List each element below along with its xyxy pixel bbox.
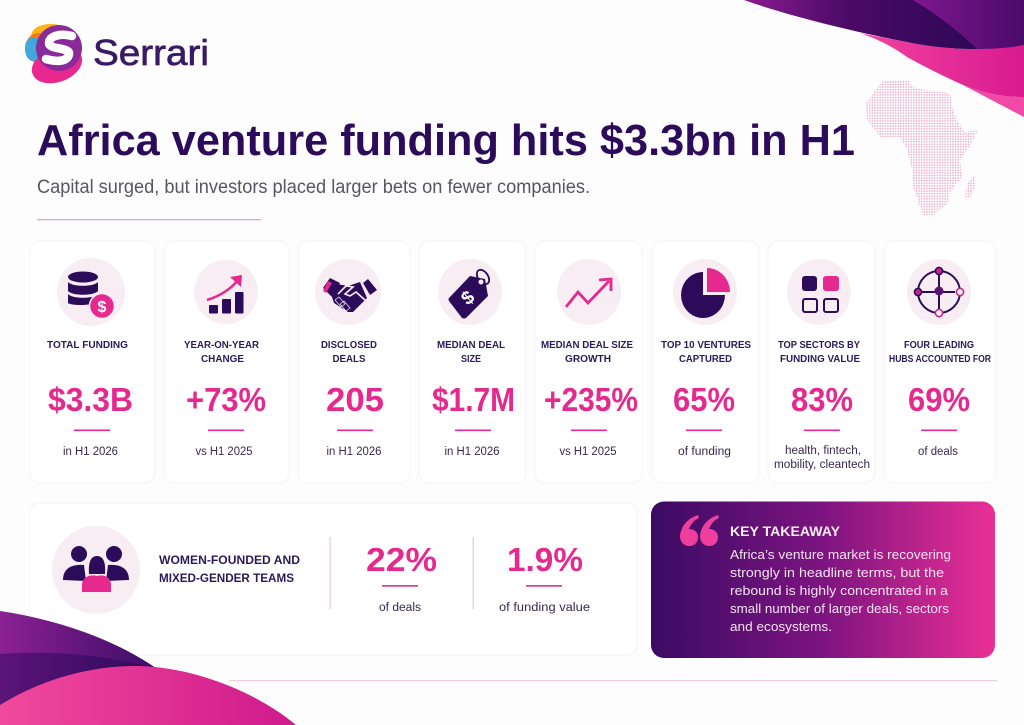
stat: 22% of deals bbox=[366, 541, 437, 614]
note: in H1 2026 bbox=[326, 446, 382, 458]
label: FOUR LEADING bbox=[904, 339, 974, 351]
panel: median deal size: SIZE bbox=[461, 353, 481, 365]
body text bbox=[730, 547, 951, 634]
subtitle: Capital surged, but investors placed larger bets on fewer companies. bbox=[37, 177, 590, 198]
value: $1.7M bbox=[432, 381, 515, 418]
label: MEDIAN DEAL bbox=[437, 339, 506, 351]
logo: Serrari bbox=[25, 23, 209, 90]
label: TOP SECTORS BY bbox=[778, 339, 860, 351]
panel: total funding bbox=[30, 241, 155, 483]
note: of funding bbox=[678, 446, 731, 458]
body text: Africa’s venture market is recovering bbox=[730, 547, 951, 562]
panel: four leading hubs: HUBS ACCOUNTED FOR bbox=[889, 353, 991, 365]
icon: coin stack: $ bbox=[98, 299, 107, 316]
icon: pie chart bbox=[673, 259, 737, 325]
value: +73% bbox=[186, 381, 266, 418]
icon: rising bars bbox=[194, 260, 258, 324]
icon: quote marks bbox=[680, 515, 719, 546]
icon: hub network bbox=[907, 259, 971, 325]
icon: price tag bbox=[438, 259, 502, 325]
panel: women-founded teams: MIXED-GENDER TEAMS bbox=[159, 571, 294, 585]
note: vs H1 2025 bbox=[560, 446, 616, 458]
note: vs H1 2025 bbox=[196, 446, 252, 458]
note: in H1 2026 bbox=[444, 446, 500, 458]
label: TOTAL FUNDING bbox=[47, 339, 128, 351]
icon: handshake bbox=[315, 259, 381, 325]
panel: disclosed deals bbox=[298, 241, 410, 483]
icon: team of people bbox=[52, 526, 140, 614]
stat: 22% of deals: 22% bbox=[366, 541, 437, 578]
wordmark: Serrari bbox=[93, 32, 209, 73]
heading: KEY TAKEAWAY bbox=[730, 523, 841, 539]
icon: zigzag arrow bbox=[557, 259, 621, 325]
panel: median deal size growth bbox=[535, 241, 642, 483]
label: WOMEN-FOUNDED AND bbox=[159, 553, 300, 567]
body text: strongly in headline terms, but the bbox=[730, 565, 944, 580]
stat: 1.9% of funding value: of funding value bbox=[499, 602, 590, 614]
panel: disclosed deals: DEALS bbox=[332, 353, 366, 365]
panel: women-founded teams bbox=[30, 503, 637, 655]
value: +235% bbox=[544, 381, 638, 418]
icon: coin stack bbox=[57, 258, 125, 326]
note: in H1 2026 bbox=[63, 446, 118, 458]
label: YEAR-ON-YEAR bbox=[184, 339, 259, 351]
body text: and ecosystems. bbox=[730, 619, 832, 634]
value: 83% bbox=[791, 381, 853, 418]
note: health, fintech, bbox=[785, 445, 861, 457]
panel: top sectors bbox=[768, 241, 875, 483]
callout: key takeaway bbox=[651, 502, 995, 658]
icon: price tag: $ bbox=[458, 287, 479, 310]
panel: top 10 ventures bbox=[652, 241, 759, 483]
body text: small number of larger deals, sectors bbox=[730, 601, 949, 616]
map: Africa dotted bbox=[866, 81, 978, 215]
value: 65% bbox=[673, 381, 735, 418]
body text: rebound is highly concentrated in a bbox=[730, 583, 949, 598]
icon: logo mark bbox=[25, 23, 87, 90]
stat: 1.9% of funding value bbox=[499, 541, 590, 614]
panel: four leading hubs bbox=[884, 241, 996, 483]
label: DISCLOSED bbox=[321, 339, 377, 351]
panel: year-on-year change: CHANGE bbox=[201, 353, 244, 365]
value: 205 bbox=[326, 381, 384, 418]
panel: median deal size growth: GROWTH bbox=[565, 353, 611, 365]
value: 69% bbox=[908, 381, 970, 418]
decorative wave: top right bbox=[744, 0, 1024, 117]
title: Africa venture funding hits $3.3bn in H1 bbox=[37, 116, 855, 165]
icon: sector squares bbox=[787, 259, 851, 325]
stat: 1.9% of funding value: 1.9% bbox=[507, 541, 583, 578]
label: TOP 10 VENTURES bbox=[661, 339, 751, 351]
note: of deals bbox=[918, 446, 958, 458]
stat: 22% of deals: of deals bbox=[379, 602, 421, 614]
panel: median deal size bbox=[419, 241, 526, 483]
panel: year-on-year change bbox=[164, 241, 289, 483]
decorative wave: bottom left bbox=[0, 611, 296, 725]
panel: top sectors: FUNDING VALUE bbox=[780, 353, 860, 365]
panel: top 10 ventures: CAPTURED bbox=[679, 353, 732, 365]
label: MEDIAN DEAL SIZE bbox=[541, 339, 633, 351]
value: $3.3B bbox=[48, 381, 133, 418]
panel: top sectors: mobility, cleantech bbox=[774, 459, 870, 471]
